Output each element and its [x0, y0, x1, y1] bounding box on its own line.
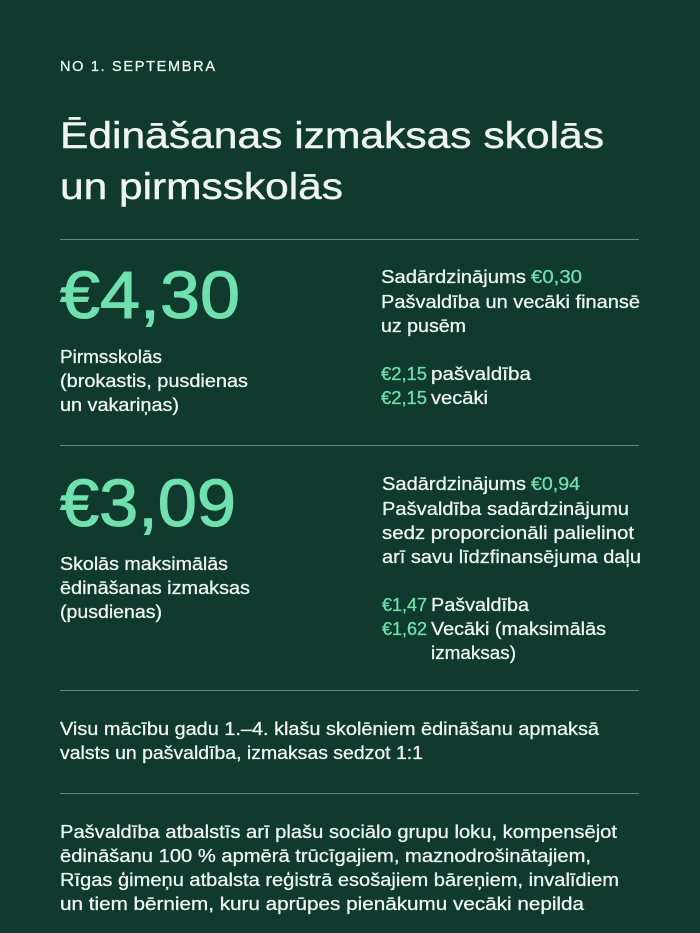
preschool description: [60, 346, 248, 415]
panel: school price rise and split: Pašvaldība sadārdzinājumu: [382, 498, 629, 519]
panel: preschool price rise and split: vecāki: [431, 387, 488, 408]
panel: preschool price rise and split: €0,30: [531, 266, 582, 287]
text block: social group support: Rīgas ģimeņu atbalsta reģistrā esošajiem bāreņiem, invalīdiem: [60, 869, 619, 890]
panel: school cost: [60, 466, 250, 622]
panel: school price rise and split: €1,47: [382, 594, 427, 615]
eyebrow: date label: NO 1. SEPTEMBRA: [60, 59, 215, 75]
panel: school price rise and split: Vecāki (maksimālās: [431, 618, 606, 639]
panel: preschool price rise and split: pašvaldība: [431, 363, 532, 384]
text block: grades 1 to 4 funding: Visu mācību gadu 1.–4. klašu skolēniem ēdināšanu apmaksā: [60, 718, 600, 739]
panel: school price rise and split: [382, 473, 641, 663]
school description: [60, 553, 250, 622]
panel: school price rise and split: sedz proporcionāli palielinot: [382, 522, 634, 543]
preschool description: un vakariņas): [60, 394, 179, 415]
panel: preschool price rise and split: €2,15: [381, 363, 427, 384]
panel: preschool price rise and split: Sadārdzinājums: [381, 266, 526, 287]
panel: preschool cost: [60, 258, 248, 415]
title: un pirmsskolās: [60, 166, 343, 207]
text block: social group support: un tiem bērniem, kuru aprūpes pienākumu vecāki nepilda: [60, 893, 585, 914]
panel: school price rise and split: arī savu līdzfinansējuma daļu: [382, 546, 641, 567]
school description: Skolās maksimālās: [60, 553, 228, 574]
preschool description: Pirmsskolās: [60, 346, 162, 367]
title: Ēdināšanas izmaksas skolās: [60, 115, 604, 156]
text block: grades 1 to 4 funding: [60, 718, 600, 763]
panel: school price rise and split: €0,94: [531, 473, 580, 494]
panel: school price rise and split: izmaksas): [431, 642, 516, 663]
big number: 3.09 euro: €3,09: [60, 466, 236, 541]
title: [60, 115, 604, 207]
panel: school price rise and split: Sadārdzinājums: [382, 473, 526, 494]
text block: social group support: Pašvaldība atbalstīs arī plašu sociālo grupu loku, kompensējot: [60, 821, 617, 842]
big number: 4.30 euro: €4,30: [60, 258, 240, 333]
preschool description: (brokastis, pusdienas: [60, 370, 248, 391]
text block: social group support: [60, 821, 619, 914]
panel: preschool price rise and split: [381, 266, 640, 408]
panel: preschool price rise and split: uz pusēm: [381, 315, 466, 336]
panel: school price rise and split: Pašvaldība: [431, 594, 530, 615]
school description: (pusdienas): [60, 601, 162, 622]
text block: grades 1 to 4 funding: valsts un pašvaldība, izmaksas sedzot 1:1: [60, 742, 423, 763]
panel: preschool price rise and split: Pašvaldība un vecāki finansē: [381, 291, 640, 312]
text block: social group support: ēdināšanu 100 % apmērā trūcīgajiem, maznodrošinātajiem,: [60, 845, 591, 866]
panel: school price rise and split: €1,62: [382, 618, 427, 639]
school description: ēdināšanas izmaksas: [60, 577, 250, 598]
panel: preschool price rise and split: €2,15: [381, 387, 427, 408]
